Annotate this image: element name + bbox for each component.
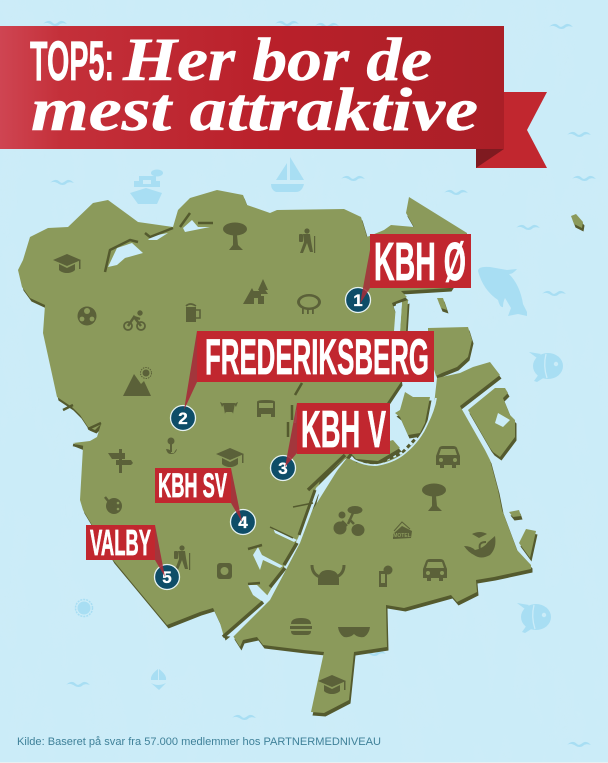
pin 1: KBH Ø: KBH Ø bbox=[374, 232, 466, 292]
icon: viking helmet bbox=[312, 565, 344, 585]
pin 4: KBH SV: 4 bbox=[238, 513, 248, 532]
map dark quay walls bbox=[63, 213, 421, 637]
icon: sheep bbox=[297, 294, 321, 314]
icon: hiker bbox=[299, 228, 315, 253]
map icons bbox=[53, 222, 495, 694]
source note: Kilde: Baseret på svar fra 57.000 medlemmer hos PARTNERMEDNIVEAU bbox=[17, 736, 381, 748]
icon: whale bbox=[478, 267, 527, 316]
title: Her bor de bbox=[122, 27, 432, 94]
icon: car bbox=[436, 446, 460, 468]
icon: sailboat bbox=[271, 157, 304, 192]
icon: football bbox=[78, 306, 96, 326]
ribbon fold bbox=[476, 149, 504, 168]
title: TOP5: bbox=[30, 29, 114, 92]
banner bbox=[0, 26, 547, 168]
icon: fish bottom bbox=[517, 603, 551, 633]
icon: motel sign bbox=[393, 522, 412, 539]
map water inlets bbox=[108, 220, 510, 637]
pin 4: KBH SV bbox=[155, 467, 256, 534]
icon: graduation cap bbox=[216, 448, 244, 467]
map bbox=[18, 190, 584, 716]
harbour water arc bbox=[352, 398, 436, 465]
pin 2: Frederiksberg bbox=[170, 329, 434, 430]
icon: sunglasses bbox=[338, 627, 370, 637]
icon: beer mug bbox=[186, 304, 200, 322]
title bbox=[30, 27, 478, 144]
banner body bbox=[0, 26, 504, 149]
pin 4: KBH SV: KBH SV bbox=[158, 467, 227, 505]
map land bbox=[18, 190, 583, 713]
icon: bikini bbox=[151, 669, 166, 690]
icon: mountain and sun bbox=[123, 368, 152, 396]
pin 1: KBH Ø bbox=[346, 232, 471, 312]
pin 3: KBH V bbox=[270, 401, 390, 480]
pin 2: Frederiksberg: 2 bbox=[178, 409, 188, 428]
pin 1: KBH Ø: 1 bbox=[353, 291, 363, 310]
icon: ship bbox=[130, 170, 163, 204]
pin 5: Valby: 5 bbox=[162, 568, 172, 587]
icon: graduation cap bbox=[318, 675, 346, 694]
icon: car bbox=[423, 559, 447, 581]
icon: tree bbox=[422, 484, 446, 511]
title: mest attraktive bbox=[31, 77, 478, 144]
icon: hiker bbox=[174, 545, 190, 570]
icon: cow bbox=[220, 402, 238, 416]
icon: sun bbox=[76, 600, 92, 616]
icon: rose bbox=[166, 438, 177, 454]
icon: signpost bbox=[108, 449, 133, 473]
icon: cyclist bbox=[124, 311, 145, 330]
icon: burger bbox=[290, 618, 312, 635]
icon: palette bbox=[105, 497, 122, 514]
icon: fish top bbox=[529, 352, 563, 382]
icon: backpack bbox=[217, 563, 232, 579]
icon: house and tree bbox=[243, 279, 268, 304]
pin 5: Valby bbox=[86, 522, 180, 590]
icon: motel sign: MOTEL bbox=[393, 533, 411, 539]
pin 3: KBH V: KBH V bbox=[301, 401, 386, 459]
icon: couple bbox=[334, 506, 364, 536]
icon: mermaid bbox=[464, 532, 495, 558]
map shadow bbox=[20, 194, 584, 716]
icon: phone with drink bbox=[379, 566, 392, 587]
icon: tree bbox=[223, 222, 247, 250]
pin 5: Valby: VALBY bbox=[90, 522, 151, 563]
pin 3: KBH V: 3 bbox=[278, 459, 288, 478]
icon: bus bbox=[257, 400, 275, 417]
ribbon tail bbox=[476, 92, 547, 168]
icon: graduation cap bbox=[53, 254, 81, 273]
